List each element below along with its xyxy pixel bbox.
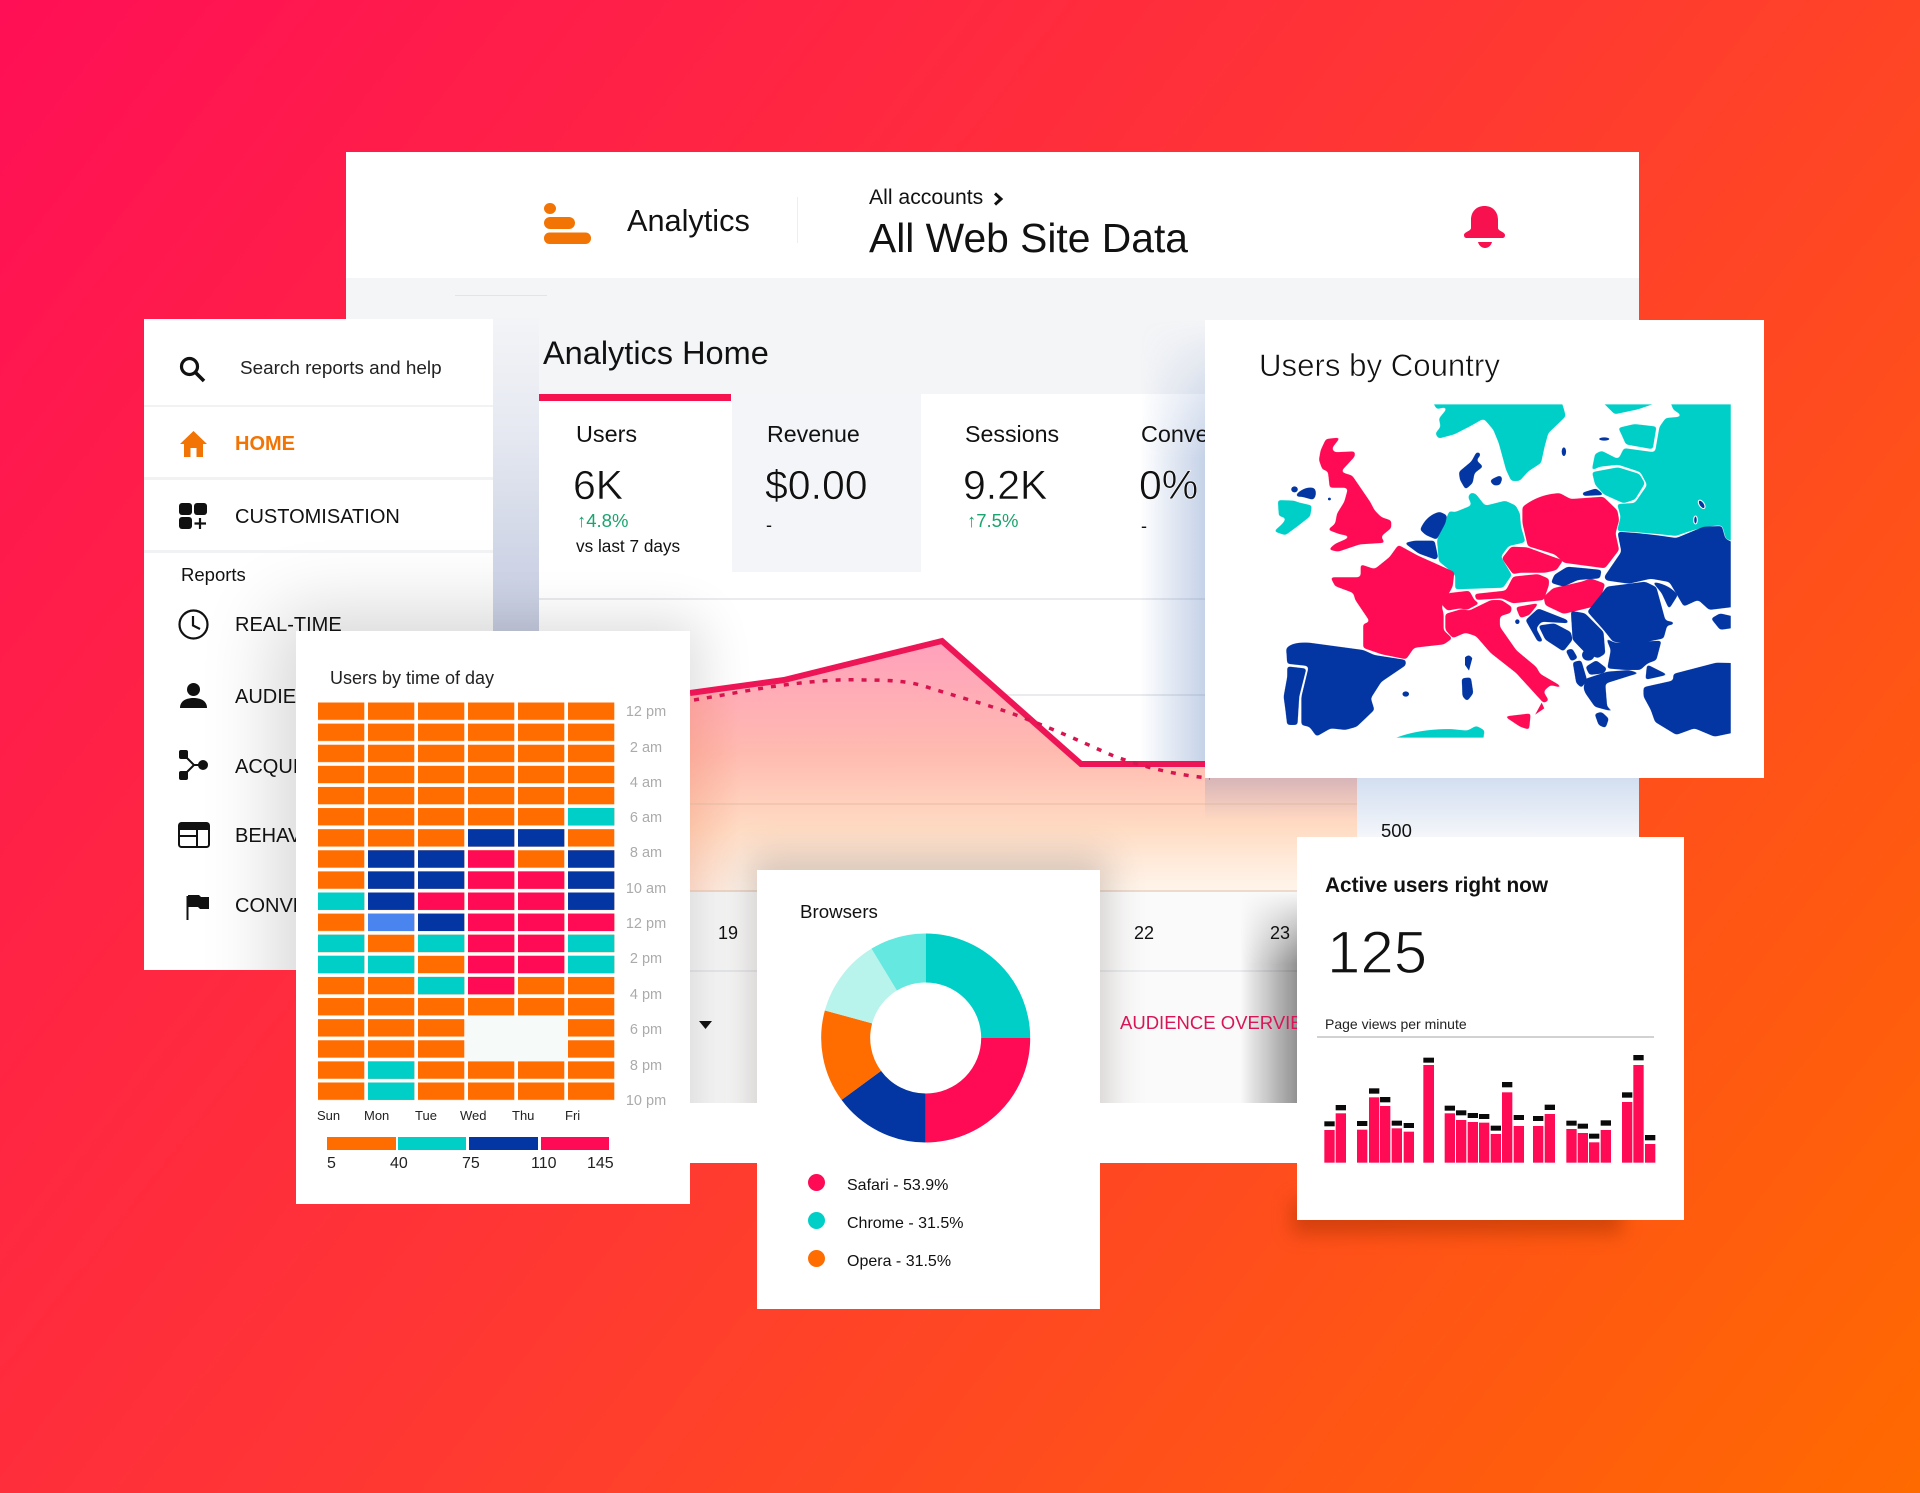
nav item: real-time: REAL-TIME	[235, 614, 342, 636]
icon: customisation	[179, 503, 207, 529]
colour scale legend: 145	[587, 1155, 614, 1172]
colour scale legend	[327, 1137, 614, 1172]
legend: chrome: Chrome - 31.5%	[847, 1215, 964, 1232]
metric value: 6K	[573, 462, 623, 508]
solid users line	[690, 641, 1210, 764]
day labels: Mon	[364, 1108, 389, 1123]
nav item: audience: AUDIENCE	[235, 686, 338, 708]
panel: users by country map	[1205, 320, 1764, 778]
chart area fill	[690, 641, 1357, 892]
day labels: Tue	[415, 1108, 437, 1123]
heading: Analytics: Analytics	[627, 203, 750, 238]
legend: opera	[808, 1250, 951, 1270]
day labels: Thu	[512, 1108, 534, 1123]
heading: all web site data: All Web Site Data	[869, 215, 1188, 261]
nav item: home: HOME	[235, 433, 295, 455]
hour labels: 4 pm	[630, 987, 662, 1003]
active tab indicator	[539, 394, 731, 401]
nav item: conversions: CONVERSIONS	[235, 895, 383, 917]
icon: notification bell	[1464, 206, 1505, 248]
divider	[1317, 1036, 1654, 1038]
metric: revenue	[765, 421, 868, 535]
metric label: Sessions	[965, 421, 1059, 447]
browsers card shadow on window	[732, 840, 1124, 1103]
panel: browsers donut	[757, 870, 1100, 1309]
legend: safari: Safari - 53.9%	[847, 1177, 948, 1194]
active users title: Active users right now	[1325, 874, 1548, 897]
row divider	[144, 477, 493, 480]
panel: users by time of day heatmap	[296, 631, 690, 1204]
row divider	[144, 405, 493, 407]
axis label 22: 22	[1134, 923, 1154, 943]
map shadow over fill	[1205, 778, 1357, 820]
browsers title: Browsers	[800, 901, 878, 922]
logo: analytics bars	[544, 203, 591, 244]
icon: dropdown triangle	[699, 1021, 712, 1029]
shadow below active users card	[1292, 1200, 1622, 1234]
day labels	[317, 1108, 580, 1123]
chart gridlines	[539, 598, 1297, 972]
search placeholder: Search reports and help	[240, 358, 442, 379]
comparison note: vs last 7 days	[576, 536, 680, 556]
nav item: acquisition: ACQUISITION	[235, 756, 365, 778]
icon: search	[180, 356, 206, 382]
map card shadow on window	[1149, 340, 1205, 761]
colour scale legend: 110	[531, 1155, 557, 1172]
metric change: ↑7.5%	[967, 510, 1018, 531]
map title: Users by Country	[1259, 348, 1500, 383]
lower band	[539, 892, 1639, 1103]
page views label: Page views per minute	[1325, 1016, 1467, 1032]
active users count: 125	[1327, 919, 1427, 986]
hour labels: 8 am	[630, 845, 662, 861]
panel: main analytics window	[346, 152, 1639, 1163]
chart left edge tint	[690, 693, 740, 892]
colour scale legend: 40	[390, 1155, 408, 1172]
hour labels: 10 am	[626, 881, 666, 897]
metric: sessions	[963, 421, 1059, 531]
axis label 19: 19	[718, 923, 738, 943]
day labels: Sun	[317, 1108, 340, 1123]
hour labels: 12 pm	[626, 916, 666, 932]
day labels: Wed	[460, 1108, 486, 1123]
colour scale legend: 5	[327, 1155, 336, 1172]
metric: conversions	[1140, 421, 1205, 536]
active users card shadow on window	[1244, 896, 1297, 1103]
axis label 500: 500	[1381, 820, 1412, 841]
axis label 23: 23	[1270, 923, 1290, 943]
day labels: Fri	[565, 1108, 580, 1123]
map: europe	[1275, 404, 1731, 738]
metric change: ↑4.8%	[577, 510, 628, 531]
metric label: Users	[576, 421, 637, 447]
region below map card	[1205, 778, 1639, 837]
hour labels: 10 pm	[626, 1093, 666, 1109]
panel: sidebar navigation	[144, 319, 493, 970]
legend: safari	[808, 1174, 948, 1194]
white metric and chart area	[539, 394, 1639, 892]
hour labels: 6 am	[630, 810, 662, 826]
icon: breadcrumb chevron	[994, 192, 1004, 206]
hour labels: 6 pm	[630, 1022, 662, 1038]
header divider	[797, 197, 798, 243]
icon: home	[180, 431, 207, 457]
heatmap shadow on window	[493, 603, 718, 1103]
icon: behaviour	[178, 822, 210, 848]
hour labels	[626, 704, 666, 1109]
breadcrumb: all accounts: All accounts	[869, 186, 983, 209]
nav item: customisation: CUSTOMISATION	[235, 506, 400, 528]
heatmap shadow on sidebar	[296, 631, 690, 1204]
colour scale legend: 75	[462, 1155, 480, 1172]
legend: opera: Opera - 31.5%	[847, 1253, 951, 1270]
metric dash: -	[1141, 516, 1147, 536]
tab: revenue background	[732, 394, 921, 572]
gray content background	[346, 278, 1639, 1103]
dashed comparison line	[694, 680, 1210, 778]
hour labels: 2 am	[630, 740, 662, 756]
panel: active users	[1297, 837, 1684, 1220]
hour labels: 8 pm	[630, 1058, 662, 1074]
metric value: $0.00	[765, 462, 868, 508]
gridlines over fill	[690, 804, 1357, 891]
icon: conversions flag	[186, 895, 209, 920]
heading: analytics home: Analytics Home	[543, 335, 769, 371]
hour labels: 2 pm	[630, 951, 662, 967]
metric dash: -	[766, 515, 772, 535]
section label: reports: Reports	[181, 564, 246, 585]
icon: acquisition	[179, 750, 208, 780]
metric label: Revenue	[767, 421, 860, 447]
nav item: behaviour: BEHAVIOUR	[235, 825, 351, 847]
metric value: 0%	[1140, 462, 1198, 508]
icon: audience person	[180, 683, 207, 708]
icon: clock	[178, 609, 209, 640]
legend: chrome	[808, 1212, 964, 1232]
row divider	[144, 550, 493, 553]
heatmap title: Users by time of day	[330, 668, 494, 688]
link: audience overview: AUDIENCE OVERVIEW	[1120, 1012, 1320, 1033]
hour labels: 4 am	[630, 775, 662, 791]
hour labels: 12 pm	[626, 704, 666, 720]
faint tab line	[455, 295, 547, 296]
blue shadow of sidebar	[493, 318, 539, 638]
metric: users	[573, 421, 680, 556]
metric value: 9.2K	[963, 462, 1047, 508]
